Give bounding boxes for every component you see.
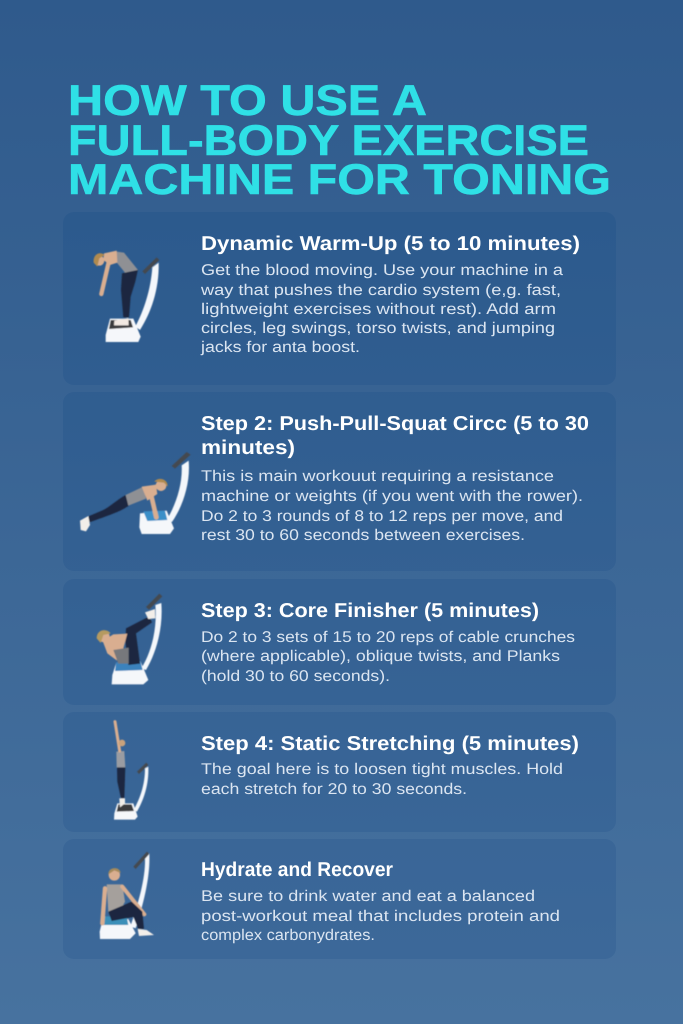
body text bbox=[200, 262, 563, 356]
body text bbox=[201, 629, 575, 685]
icon: woman doing crunch on machine bbox=[97, 594, 162, 684]
title: HOW TO USE A bbox=[68, 77, 427, 125]
body text: This is main workouut requiring a resistance bbox=[201, 468, 554, 485]
heading: Hydrate and Recover bbox=[201, 859, 393, 881]
body text bbox=[201, 468, 583, 544]
body text: jacks for anta boost. bbox=[200, 339, 360, 356]
body text: lightweight exercises without rest). Add arm bbox=[201, 301, 556, 318]
body text: (where applicable), oblique twists, and Planks bbox=[201, 648, 560, 665]
body text: post-workout meal that includes protein and bbox=[201, 908, 560, 925]
body text: circles, leg swings, torso twists, and jumping bbox=[201, 320, 555, 337]
icon: woman bending forward on machine bbox=[94, 251, 159, 342]
body text bbox=[201, 888, 560, 944]
body text: Do 2 to 3 sets of 15 to 20 reps of cable crunches bbox=[201, 629, 575, 646]
panel: core finisher bbox=[63, 579, 616, 705]
body text: machine or weights (if you went with the rower). bbox=[201, 488, 583, 505]
body text: (hold 30 to 60 seconds). bbox=[201, 668, 390, 685]
heading bbox=[201, 413, 589, 459]
heading: minutes) bbox=[201, 437, 295, 459]
body text: each stretch for 20 to 30 seconds. bbox=[201, 781, 467, 798]
body text: Be sure to drink water and eat a balanced bbox=[201, 888, 535, 905]
body text: complex carbonydrates. bbox=[201, 927, 375, 944]
icon: woman in plank on machine bbox=[80, 452, 191, 534]
title bbox=[68, 77, 611, 204]
panel: hydrate and recover bbox=[63, 839, 616, 959]
body text: Do 2 to 3 rounds of 8 to 12 reps per move, and bbox=[201, 508, 563, 525]
panel: static stretching bbox=[63, 712, 616, 832]
panel: dynamic warm-up bbox=[63, 212, 616, 385]
body text: rest 30 to 60 seconds between exercises. bbox=[201, 527, 525, 544]
body text: The goal here is to loosen tight muscles. Hold bbox=[201, 761, 563, 778]
title: FULL-BODY EXERCISE bbox=[68, 117, 589, 165]
title: MACHINE FOR TONING bbox=[68, 156, 611, 204]
icon: woman seated on machine bbox=[100, 852, 154, 939]
body text bbox=[201, 761, 563, 798]
heading: Dynamic Warm-Up (5 to 10 minutes) bbox=[201, 233, 580, 255]
body text: way that pushes the cardio system (e,g. fast, bbox=[200, 282, 561, 299]
panel: push-pull-squat circuit bbox=[63, 392, 616, 571]
heading: Step 4: Static Stretching (5 minutes) bbox=[201, 733, 579, 755]
body text: Get the blood moving. Use your machine in a bbox=[201, 262, 563, 279]
heading: Step 2: Push-Pull-Squat Circc (5 to 30 bbox=[201, 413, 589, 435]
icon: woman stretching arms up on machine bbox=[114, 722, 148, 820]
heading: Step 3: Core Finisher (5 minutes) bbox=[201, 600, 539, 622]
